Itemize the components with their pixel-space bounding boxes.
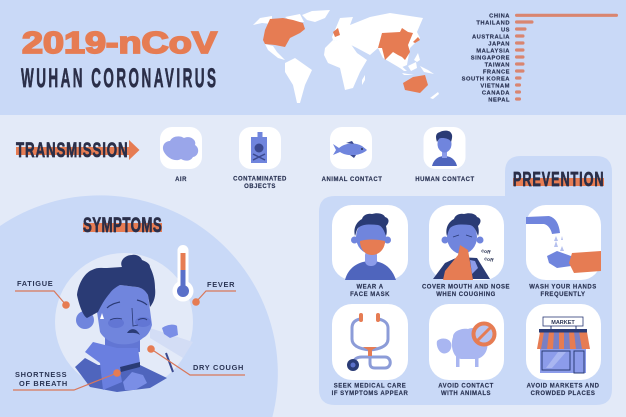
callout: shortness of breath: OF BREATH [19,379,68,388]
card: avoid contact with animals: WITH ANIMALS [441,391,491,397]
card: wear a face mask [332,205,408,298]
card: cover mouth and nose: coff [484,256,494,264]
card: avoid markets: CROWDED PLACES [531,391,595,397]
sick person [75,255,193,392]
country bar chart: TAIWAN [485,62,510,68]
card: seek medical care: SEEK MEDICAL CARE [334,384,406,390]
country bar chart: JAPAN [488,41,510,47]
country bar chart: THAILAND [476,20,510,26]
card: air [160,127,202,183]
card: cover mouth and nose [422,205,510,298]
card: animal contact [322,127,382,183]
header band [0,0,626,115]
panel: prevention [319,156,612,405]
panel: symptoms [0,195,278,417]
card: avoid contact with animals: AVOID CONTACT [438,384,494,390]
card: wear a face mask: FACE MASK [350,292,390,298]
thermometer [172,245,194,302]
card: seek medical care: IF SYMPTOMS APPEAR [332,391,408,397]
card: animal contact: ANIMAL CONTACT [322,177,382,183]
country bar chart: NEPAL [488,97,510,103]
card: avoid markets: AVOID MARKETS AND [527,384,600,390]
world map [253,10,439,103]
country bar chart [462,14,618,103]
country bar chart: AUSTRALIA [472,34,510,40]
card: human contact [415,127,475,183]
card: cover mouth and nose: WHEN COUGHING [436,292,496,298]
card: cover mouth and nose: COVER MOUTH AND NOSE [422,284,510,290]
card: avoid markets [526,304,601,397]
country bar chart: CHINA [489,14,510,20]
card: contaminated objects: CONTAMINATED [233,176,287,182]
heading: prevention: PREVENTION [513,168,604,191]
country bar chart: SINGAPORE [471,55,510,61]
callout: fever: FEVER [207,280,235,289]
card: wash your hands [526,205,601,298]
callout: shortness of breath: SHORTNESS [15,370,67,379]
card: wash your hands: WASH YOUR HANDS [529,284,597,290]
card: seek medical care [332,304,408,397]
card: air: AIR [175,177,187,183]
card: wear a face mask: WEAR A [356,284,384,290]
callout: dry cough: DRY COUGH [193,363,244,372]
country bar chart: VIETNAM [480,83,510,89]
callout: fever [192,280,236,306]
country bar chart: MALAYSIA [476,48,510,54]
country bar chart: FRANCE [483,69,510,75]
card: contaminated objects: OBJECTS [244,184,276,190]
callout: fatigue: FATIGUE [17,279,53,288]
callout: dry cough [147,345,245,375]
heading: symptoms: SYMPTOMS [83,213,162,237]
transmission heading with arrow: TRANSMISSION [16,138,128,162]
card: wash your hands: FREQUENTLY [540,292,586,298]
card: contaminated objects [233,127,287,190]
callout: fatigue [15,279,70,309]
card: human contact: HUMAN CONTACT [415,177,475,183]
card: cover mouth and nose: coff [481,248,491,256]
title: 2019-nCoV [22,25,217,60]
title: WUHAN CORONAVIRUS [21,63,216,93]
country bar chart: SOUTH KOREA [462,76,510,82]
callout: shortness of breath [13,369,121,390]
country bar chart: CANADA [482,90,510,96]
title [21,25,217,93]
card: avoid contact with animals [429,304,504,397]
country bar chart: US [501,27,510,33]
card: avoid markets: MARKET [551,320,575,326]
